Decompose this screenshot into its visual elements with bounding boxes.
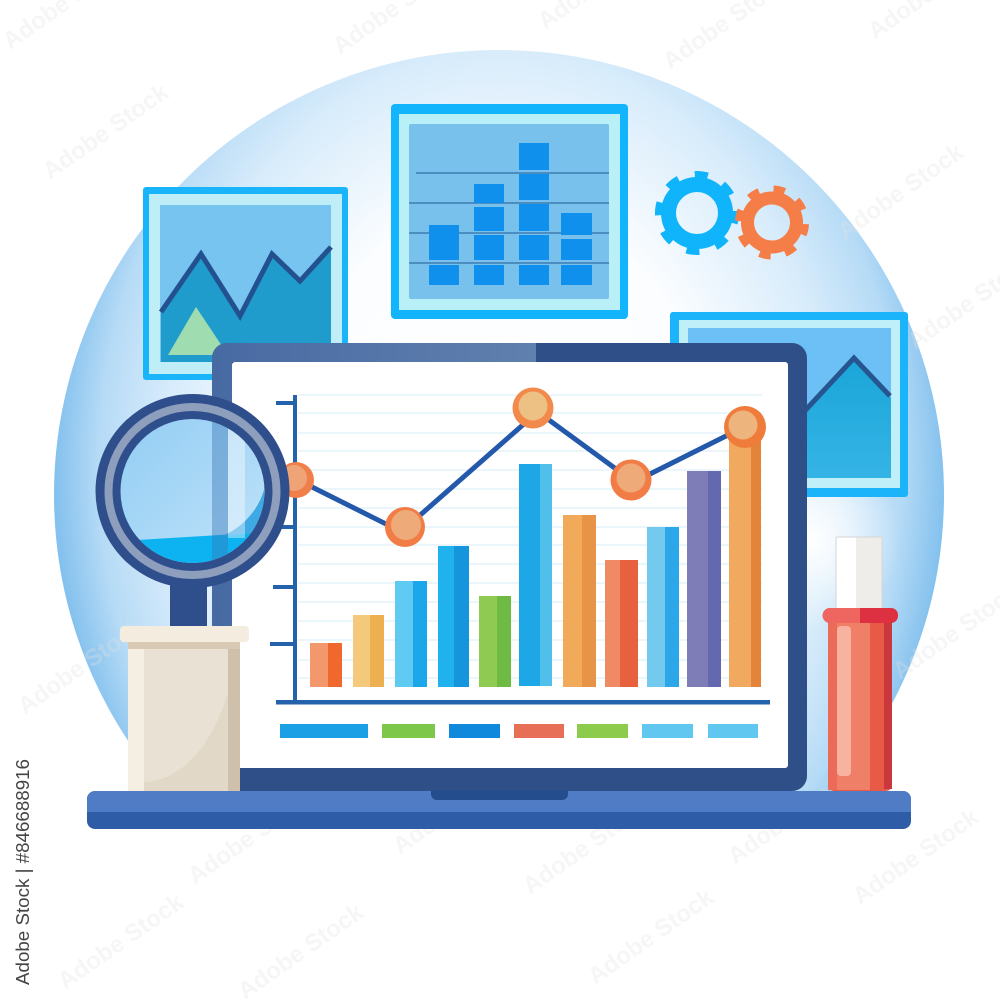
background circle xyxy=(54,50,944,791)
icon: blue gear xyxy=(655,171,739,255)
watermark: Adobe Stock xyxy=(13,613,149,720)
watermark: Adobe Stock xyxy=(518,793,654,900)
pot xyxy=(120,626,249,791)
stock id caption: Adobe Stock | #846688916 xyxy=(13,759,33,985)
watermark: Adobe Stock xyxy=(723,763,859,870)
panel: mountain chart left xyxy=(143,187,348,380)
chart axes xyxy=(270,395,770,704)
bar chart xyxy=(310,440,761,687)
panel: mountain chart right xyxy=(670,312,908,497)
watermark: Adobe Stock xyxy=(183,783,319,890)
panel: bar chart top xyxy=(391,104,628,319)
laptop screen xyxy=(212,343,807,791)
icon: orange gear xyxy=(732,183,812,262)
watermark: Adobe Stock xyxy=(38,78,174,185)
icon: magnifying glass xyxy=(96,394,290,628)
chart legend xyxy=(280,724,758,738)
test tube xyxy=(823,537,898,791)
line chart grid xyxy=(298,395,762,678)
trend line xyxy=(278,388,766,547)
watermark: Adobe Stock xyxy=(388,753,524,860)
laptop base xyxy=(87,791,911,829)
watermark: Adobe Stock xyxy=(53,888,189,995)
watermark: Adobe Stock xyxy=(833,138,969,245)
watermark: Adobe Stock xyxy=(583,883,719,990)
watermark: Adobe Stock xyxy=(848,803,984,910)
